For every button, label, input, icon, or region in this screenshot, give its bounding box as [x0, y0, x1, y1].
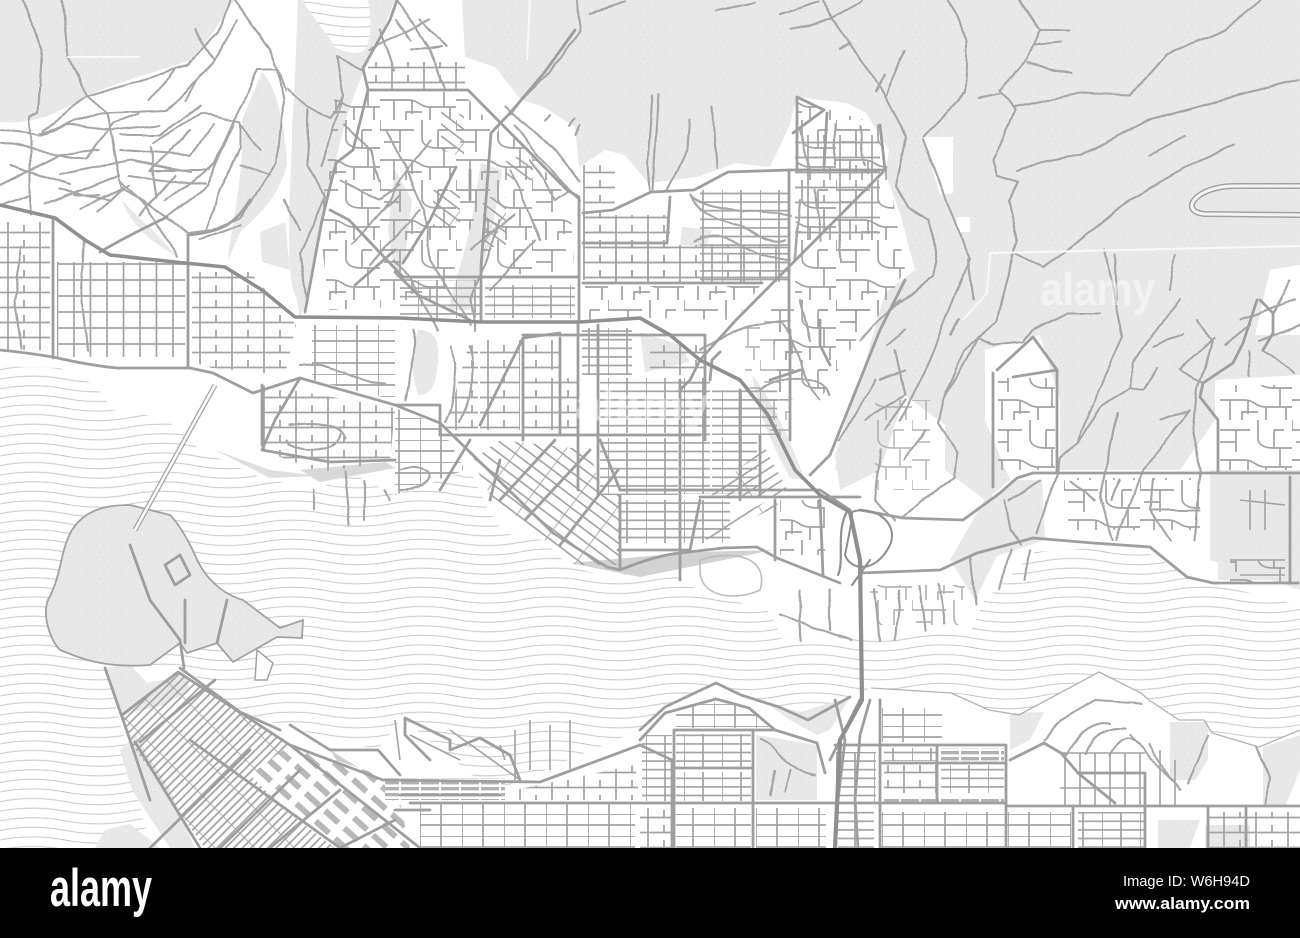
website: www.alamy.com: [1114, 894, 1250, 913]
Capilano valley: [289, 60, 335, 312]
faint alamy watermarks: [575, 263, 1155, 430]
Deep Cove side neighbourhoods: [998, 378, 1055, 470]
port gray strips: [300, 462, 395, 482]
Upper Levels Highway and Ironworkers Bridge: [0, 205, 892, 848]
watermark centre: alamy: [575, 378, 710, 430]
Lower Lonsdale diagonal blocks: [472, 440, 620, 565]
watermark right: alamy: [1040, 263, 1155, 315]
Dollarton and Mt Seymour Parkway: [860, 473, 1300, 520]
West Vancouver grid: [57, 262, 185, 357]
East Vancouver grid: [676, 702, 772, 728]
shoreline outline on the south shore: [871, 672, 1300, 747]
south shore neighbourhood streets: [395, 490, 1285, 805]
water: Burrard Inlet and English Bay: [0, 366, 1300, 848]
Lynn Valley: [770, 300, 880, 400]
Marine Drive central and main diagonal: [395, 405, 840, 583]
image id: Image ID: W6H94D: [1123, 873, 1250, 890]
Upper Lonsdale arterials: [583, 170, 885, 360]
reservoir wave lines: [303, 0, 370, 53]
small island plot: [255, 650, 273, 680]
Pemberton grid: [312, 325, 395, 400]
footer bar: [0, 848, 1300, 938]
Vancouver arterials: [122, 672, 420, 848]
West Vancouver hillside roads: [23, 0, 123, 215]
Burnaby and East Van arterials: [410, 700, 1300, 848]
white lines in the mountains: [67, 0, 1300, 320]
Edgemont arterials: [305, 0, 397, 312]
wave lines on the water: [0, 366, 1300, 848]
reservoir at the top: [303, 0, 370, 53]
Lynn and Seymour creeks: [900, 0, 973, 420]
switchback road inner: [1192, 186, 1300, 215]
south shore parks: [756, 735, 817, 800]
port outline: [180, 668, 520, 780]
Hollyburn valley: [228, 72, 287, 262]
Upper Lonsdale: [583, 165, 615, 245]
Lions Gate Bridge: [135, 385, 215, 530]
alamy logo: alamy: [50, 859, 152, 918]
West End: [122, 672, 395, 848]
Stanley Park: [46, 505, 303, 666]
gray parks and creek corridors: [95, 60, 1300, 848]
Marine Drive west: [0, 350, 395, 405]
Capilano river trails: [287, 57, 363, 300]
Mount Seymour switchback: [1192, 186, 1300, 215]
Central Lonsdale: [523, 340, 560, 370]
Vancouver downtown blocks: [250, 745, 410, 848]
Edgemont and Capilano Highlands: [368, 62, 465, 90]
North Van east-west streets: [440, 333, 860, 510]
Stanley Park causeway: [130, 545, 227, 668]
